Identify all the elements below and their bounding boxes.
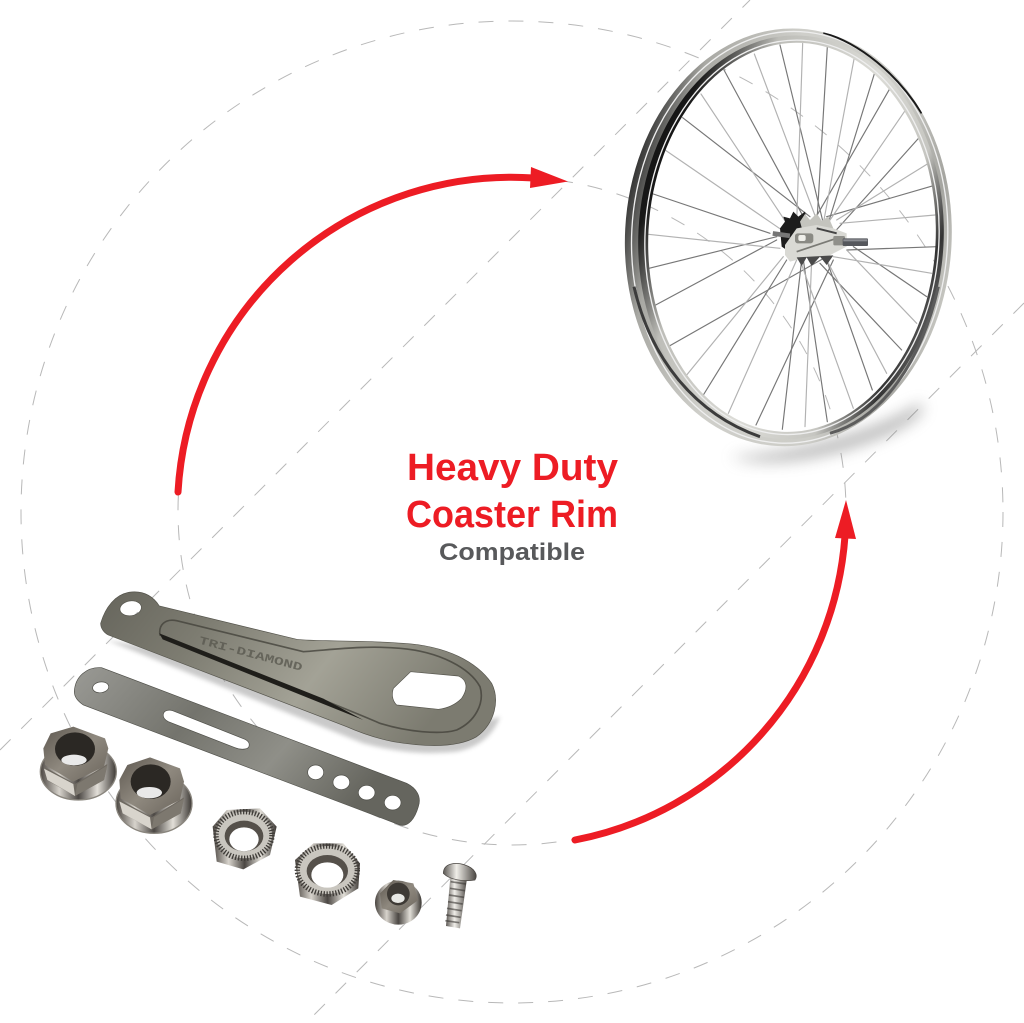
serrated nut 1 bbox=[213, 808, 277, 869]
serrated nut 2 bbox=[295, 843, 360, 905]
heading: Heavy Duty Coaster Rim Compatible bbox=[406, 447, 618, 566]
arm recess bbox=[160, 620, 481, 732]
hub and sprocket bbox=[772, 212, 868, 266]
wheel illustration bbox=[620, 20, 963, 470]
arm shadow bbox=[107, 640, 500, 753]
wheel ground shadow bbox=[730, 403, 923, 462]
heading: Heavy Duty Coaster Rim Compatible: Coaster Rim bbox=[406, 494, 618, 536]
small flange nut bbox=[375, 880, 422, 925]
coaster brake arm bbox=[101, 592, 496, 745]
rim bbox=[624, 28, 952, 446]
arm engraving: TRI-DIAMOND bbox=[197, 636, 304, 675]
spokes bbox=[648, 43, 937, 429]
mounting strip bbox=[74, 668, 419, 825]
flange nut 2 bbox=[116, 757, 192, 833]
flange nut 1 bbox=[40, 727, 116, 800]
hardware parts bbox=[40, 592, 500, 928]
arrow: parts to wheel bbox=[178, 167, 568, 492]
arrow: wheel from parts bbox=[575, 500, 856, 840]
heading: Heavy Duty Coaster Rim Compatible: Heavy Duty bbox=[407, 447, 618, 489]
bolt bbox=[443, 863, 476, 928]
heading: Heavy Duty Coaster Rim Compatible: Compatible bbox=[439, 539, 585, 566]
